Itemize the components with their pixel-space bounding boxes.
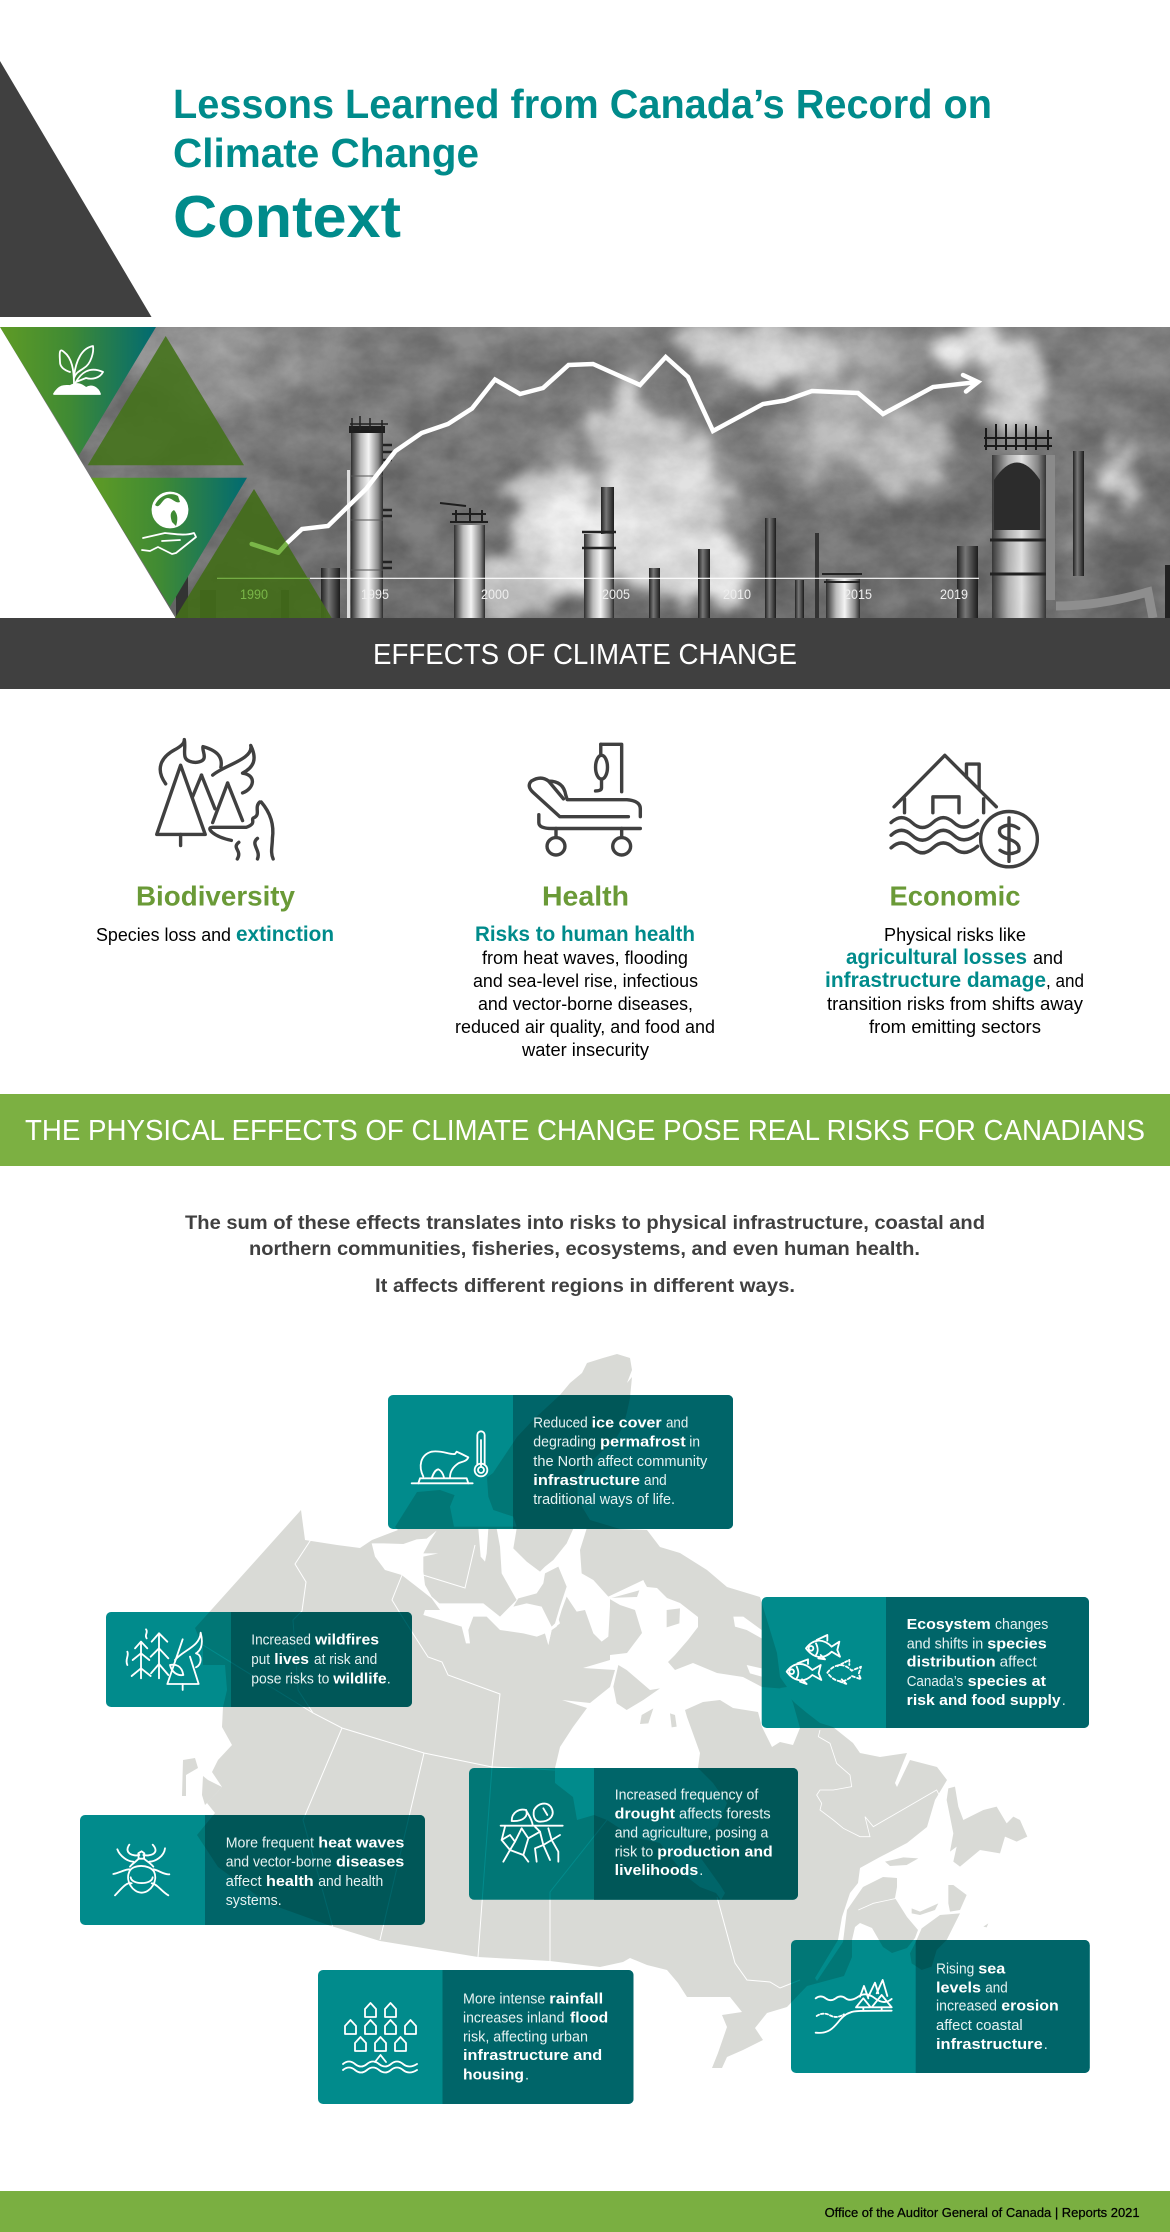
icon: tick [113,1845,169,1895]
icon: biodiversity, burning trees and fox [157,740,273,859]
card: drought: affects forests [679,1806,771,1822]
card: wildfires: . [387,1671,391,1687]
card: ecosystems: Ecosystem [907,1616,991,1633]
card: north: traditional ways of life. [533,1492,675,1508]
card: drought: drought [615,1805,675,1822]
year labels: 2005 [602,586,630,602]
card: rainfall and floods: rainfall [549,1990,603,2007]
card: heat waves and disease [80,1815,425,1925]
icon: fish [787,1635,861,1684]
card: sea levels [791,1940,1090,2073]
card: sea levels: . [1044,2037,1048,2053]
card: heat waves and disease: and health [318,1874,383,1890]
panel: economic: and [1033,948,1063,968]
card: rainfall and floods: infrastructure and [463,2047,602,2064]
card: sea levels: sea [978,1960,1006,1977]
panel: health: reduced air quality, and food and [455,1017,715,1037]
card: north [388,1395,733,1529]
header decorative dark triangle [0,61,152,317]
icon: flooded houses [343,2003,417,2072]
panel: green triangles and icons [0,327,332,618]
card: rainfall and floods: flood [570,2010,608,2027]
year labels: 1990 [240,586,268,602]
card: north: and [666,1416,688,1432]
mottled smoke texture [0,327,1170,618]
card: north: degrading [533,1435,596,1451]
card: wildfires: at risk and [314,1652,377,1668]
card: heat waves and disease: and vector-borne [226,1855,332,1871]
footer [0,2191,1170,2232]
card: rainfall and floods: housing [463,2066,524,2083]
provincial borders [203,1538,940,1988]
panel: biodiversity [96,880,334,946]
icon: burning forest [126,1629,202,1690]
panel: health: and sea-level rise, infectious [473,971,698,991]
title: Context [173,184,401,250]
card: ecosystems: risk and food supply [907,1692,1061,1709]
card: rainfall and floods: risk, affecting urban [463,2030,588,2046]
Newfoundland [947,1787,1027,1867]
card: drought: production and [657,1844,773,1861]
icon: plant and cracked soil [501,1804,563,1862]
year labels: 2010 [723,586,751,602]
card: sea levels: infrastructure [936,2036,1043,2053]
card: drought: risk to [615,1845,653,1861]
card: ecosystems: species [987,1635,1047,1652]
section banner: physical effects: THE PHYSICAL EFFECTS OF CLIMATE CHANGE POSE REAL RISKS FOR CANADIANS [25,1115,1145,1147]
land mass [195,1354,947,2068]
panel: economic: Economic [890,880,1020,912]
year labels: 2019 [940,586,968,602]
icon: globe in hand [142,492,196,554]
card: ecosystems [762,1597,1089,1728]
panel: health: water insecurity [521,1040,649,1060]
section banner: effects of climate change [0,618,1170,689]
card: ecosystems: affect [1000,1655,1037,1671]
card: drought [469,1768,798,1900]
card: heat waves and disease: affect [226,1874,262,1890]
card: rainfall and floods: More intense [463,1991,545,2007]
footer: Office of the Auditor General of Canada | Reports 2021 [825,2205,1140,2220]
icon: polar bear and thermometer [412,1431,487,1483]
card: wildfires: wildlife [332,1670,387,1687]
title: Climate Change [173,130,479,176]
panel: economic: transition risks from shifts away [827,994,1083,1014]
card: ecosystems: . [1062,1693,1066,1709]
Anticosti [885,1857,918,1866]
card: wildfires: put [251,1652,270,1668]
panel: economic [825,880,1084,1037]
year labels: 1995 [361,586,389,602]
card: north: Reduced [533,1416,588,1432]
card: north: the North affect community [533,1454,708,1470]
intro text: The sum of these effects translates into risks to physical infrastructure, coastal and [185,1212,985,1234]
card: rainfall and floods: . [525,2067,529,2083]
title [173,81,992,250]
card: ecosystems: and shifts in [907,1636,983,1652]
Nova Scotia [910,1913,960,1970]
icon: seedling [54,346,103,394]
card: wildfires: pose risks to [251,1671,329,1687]
panel: economic: agricultural losses [846,946,1027,969]
card: sea levels: Rising [936,1961,974,1977]
panel: economic: Physical risks like [884,925,1026,945]
card: wildfires: lives [274,1651,309,1668]
card: ecosystems: distribution [907,1654,996,1671]
Prince Edward Island [912,1903,938,1915]
card: wildfires: Increased [251,1633,311,1649]
panel: health: from heat waves, flooding [482,948,688,968]
card: sea levels: increased [936,1999,997,2015]
card: north: infrastructure [533,1472,640,1489]
card: rainfall and floods: increases inland [463,2011,564,2027]
icon: economic, flooded house with dollar coin [891,755,1037,867]
Pacific islands [182,1758,198,1796]
card: sea levels: levels [936,1979,981,1996]
axis [217,577,310,579]
panel: biodiversity: Species loss and [96,925,231,945]
card: sea levels: and [985,1980,1008,1996]
card: north: ice cover [592,1415,662,1432]
panel: health: Health [542,880,629,912]
icon: health, hospital bed with IV [529,744,640,855]
arctic channels [372,1531,560,1645]
left white wedge [0,327,176,618]
map of Canada [182,1354,1027,2068]
card: north: and [644,1473,667,1489]
year labels [240,586,968,602]
panel: biodiversity: extinction [236,923,334,946]
card: drought: and agriculture, posing a [615,1825,769,1841]
card: wildfires: wildfires [314,1632,379,1649]
hero photo: refinery and smoke with emissions chart [0,315,1170,626]
intro text: northern communities, fisheries, ecosystems, and even human health. [249,1238,920,1260]
title: Lessons Learned from Canada’s Record on [173,81,992,127]
section banner: effects of climate change: EFFECTS OF CLIMATE CHANGE [373,639,797,671]
card: rainfall and floods [318,1970,634,2104]
card: drought: Increased frequency of [615,1787,759,1803]
card: heat waves and disease: health [266,1873,314,1890]
card: heat waves and disease: diseases [336,1854,404,1871]
card: ecosystems: changes [995,1617,1048,1633]
card: sea levels: erosion [1001,1998,1059,2015]
card: heat waves and disease: heat waves [318,1835,404,1852]
panel: biodiversity: Biodiversity [136,880,295,912]
card: sea levels: affect coastal [936,2018,1023,2034]
card: drought: livelihoods [615,1862,698,1879]
card: heat waves and disease: More frequent [226,1836,314,1852]
year labels: 2015 [844,586,872,602]
arctic islands [513,1529,573,1572]
section banner: physical effects [0,1094,1170,1166]
card: heat waves and disease: systems. [226,1893,282,1909]
Hudson Bay and strait [555,1580,800,1900]
panel: health: Risks to human health [475,923,695,946]
panel: economic: from emitting sectors [869,1017,1041,1037]
panel: economic: infrastructure damage [825,969,1046,992]
year labels: 2000 [481,586,509,602]
intro text [185,1212,985,1297]
chart: emissions trend line [217,357,979,602]
intro text: It affects different regions in different ways. [375,1275,795,1297]
card: ecosystems: Canada’s [907,1674,963,1690]
panel: economic: , and [1046,971,1084,991]
panel: health: and vector-borne diseases, [478,994,693,1014]
card: ecosystems: species at [968,1673,1046,1690]
icon: coastline with trees [816,1980,892,2033]
smoke clouds [133,327,955,600]
Cape Breton [948,1885,967,1912]
card: north: in [689,1435,700,1451]
refinery towers [176,416,1170,618]
card: drought: . [699,1863,703,1879]
card: wildfires [106,1612,412,1707]
card: north: permafrost [600,1434,686,1451]
panel: health [455,880,715,1060]
